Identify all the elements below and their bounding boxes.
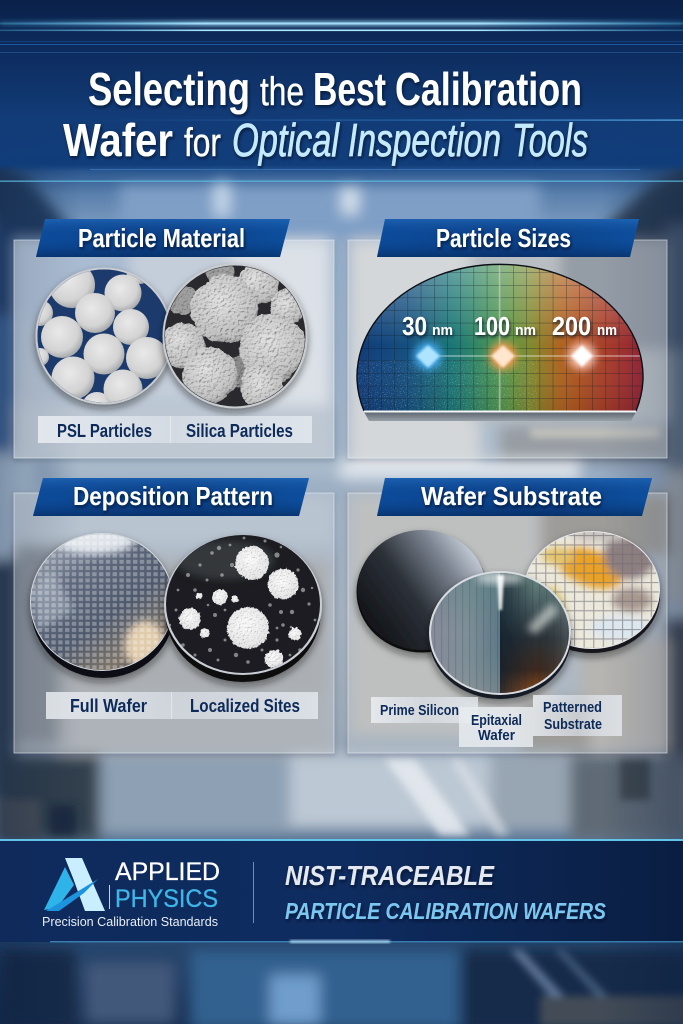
- size labels: [402, 311, 617, 341]
- label: epitaxial wafer: Epitaxial: [471, 712, 522, 729]
- heading: wafer substrate: [377, 478, 652, 516]
- PSL particles circle: [30, 266, 170, 414]
- title: Calibration: [395, 63, 582, 115]
- epitaxial wafer: [429, 570, 571, 699]
- labels: deposition: [46, 692, 318, 719]
- prime silicon wafer: [356, 530, 488, 652]
- label: epitaxial wafer: Wafer: [478, 727, 515, 744]
- heading: deposition pattern: [33, 478, 309, 516]
- labels: material: PSL Particles: [57, 421, 152, 441]
- size labels: 200: [552, 311, 591, 341]
- wafer base shadow: [364, 412, 636, 421]
- heading: deposition pattern: Deposition Pattern: [73, 481, 273, 511]
- localized sites wafer: [164, 535, 322, 682]
- title: Best: [313, 63, 386, 115]
- heading: wafer substrate: Wafer Substrate: [421, 481, 602, 511]
- header band: [0, 0, 683, 182]
- spot: 200 nm: [568, 342, 596, 370]
- size labels: nm: [515, 322, 536, 339]
- size labels: 100: [474, 311, 510, 341]
- silica particles circle: [159, 258, 310, 412]
- patterned substrate wafer: [520, 528, 665, 653]
- labels: material: Silica Particles: [186, 421, 293, 441]
- title: Wafer: [63, 114, 173, 166]
- spot: 30 nm: [414, 342, 442, 370]
- title: [63, 63, 588, 166]
- wafer spectrum dome: [350, 260, 650, 415]
- size labels: nm: [597, 322, 617, 339]
- logo: [42, 858, 220, 929]
- title: for: [184, 121, 221, 165]
- heading: particle sizes: Particle Sizes: [436, 223, 571, 253]
- logo: PHYSICS: [115, 885, 218, 913]
- title: Inspection: [348, 114, 501, 166]
- labels: deposition: Full Wafer: [70, 696, 147, 716]
- label: prime silicon: Prime Silicon: [380, 702, 459, 719]
- heading: particle material: [36, 219, 290, 257]
- panel: particle sizes: [348, 219, 667, 458]
- icon: A mark: [44, 858, 105, 911]
- heading: particle material: Particle Material: [78, 223, 245, 253]
- tagline: NIST-TRACEABLE: [285, 860, 495, 891]
- tagline: PARTICLE CALIBRATION WAFERS: [285, 898, 607, 924]
- title: Selecting: [88, 63, 250, 115]
- tagline: [285, 860, 607, 924]
- spot: 100 nm: [489, 342, 517, 370]
- labels: deposition: Localized Sites: [190, 696, 300, 716]
- label: epitaxial wafer: [459, 707, 533, 747]
- title: Optical: [232, 114, 340, 166]
- footer band: [0, 839, 683, 943]
- size labels: nm: [432, 322, 453, 339]
- panel: wafer substrate: [348, 478, 667, 753]
- logo: Precision Calibration Standards: [42, 914, 218, 929]
- label: patterned substrate: Substrate: [544, 716, 602, 733]
- logo: APPLIED: [115, 858, 220, 886]
- size labels: 30: [402, 311, 427, 341]
- title: Tools: [512, 114, 588, 166]
- panel: particle material: [14, 219, 334, 458]
- labels: material: [38, 416, 312, 443]
- heading: particle sizes: [377, 219, 639, 257]
- full wafer: [25, 526, 180, 678]
- label: patterned substrate: [533, 695, 622, 736]
- panel: deposition pattern: [14, 478, 334, 753]
- label: patterned substrate: Patterned: [543, 699, 602, 716]
- label: prime silicon: [371, 697, 478, 723]
- title: the: [260, 70, 304, 114]
